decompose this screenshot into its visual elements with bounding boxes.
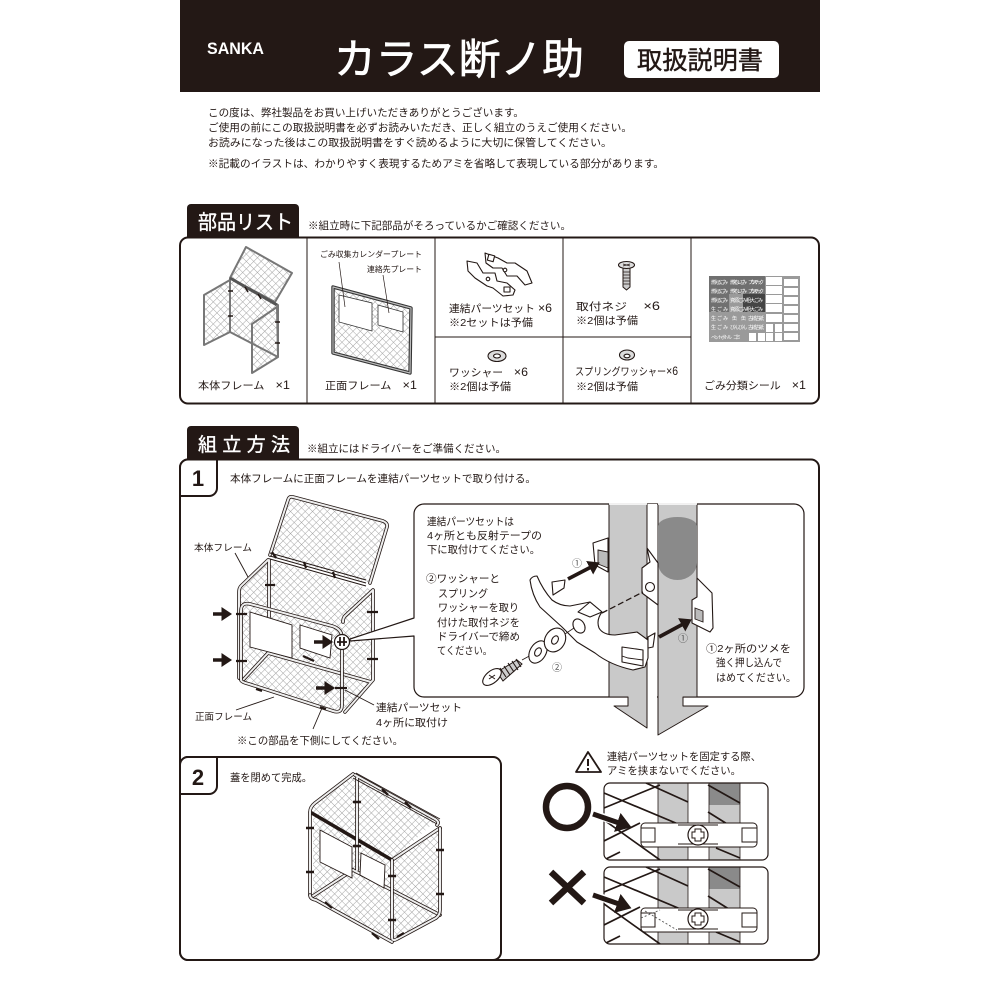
part: garbage sticker: プラスチック (748, 280, 764, 286)
heading tab: assembly (187, 426, 299, 460)
part: garbage sticker: 古紙 古紙 (748, 324, 764, 331)
frame labels (194, 542, 462, 747)
circled numbers (552, 558, 688, 674)
step 1 text: 本体フレームに正面フレームを連結パーツセットで取り付ける。 (230, 472, 536, 485)
clamp front half (530, 576, 655, 670)
part: garbage sticker: ごみ分類シール ×1 (704, 378, 806, 392)
part: garbage sticker: 粗大ごみ (746, 297, 763, 304)
warning note: アミを挟まないでください。 (607, 764, 741, 777)
part: garbage sticker: 燃えないごみ (730, 288, 747, 295)
part: garbage sticker: 資源ごみ (730, 306, 747, 313)
callout text: step 1: 強く押し込んで (716, 656, 782, 669)
part: garbage sticker: ゴミ (733, 334, 741, 341)
part: front frame: 連絡先プレート (367, 264, 422, 274)
callout: connector detail (350, 504, 804, 735)
part: garbage sticker: 生ごみ (711, 306, 728, 313)
part: main frame: 本体フレーム ×1 (198, 378, 290, 392)
dashed guide line (602, 592, 643, 613)
correct example panel (593, 783, 768, 860)
callout text: tape position: 4ヶ所とも反射テープの (427, 529, 542, 542)
part: connector set (449, 253, 552, 329)
intro text: この度は、弊社製品をお買い上げいただきありがとうございます。 (208, 106, 524, 119)
part: connector set: ※2セットは予備 (449, 317, 534, 329)
frame labels: 4ヶ所に取付け (376, 716, 448, 729)
intro text: ご使用の前にこの取扱説明書を必ずお読みいただき、正しく組立のうえご使用ください。 (208, 121, 632, 134)
circled numbers: ① (572, 558, 582, 570)
heading tab: parts list: 部品リスト (198, 211, 293, 234)
callout text: tape position: 連結パーツセットは (427, 515, 514, 528)
manual badge (624, 41, 779, 78)
callout text: step 1 (706, 642, 796, 684)
part: connector set: 連結パーツセット ×6 (449, 301, 552, 315)
connector plate with trapped mesh (641, 908, 757, 932)
step 2 number (180, 757, 217, 794)
part: spring washer (575, 350, 678, 393)
part: garbage sticker: 古紙 古紙 (748, 315, 764, 322)
arrows on frame (213, 614, 328, 688)
connector plate (641, 823, 757, 847)
step 2 number: 2 (192, 765, 204, 790)
callout text: step 2: ②ワッシャーと (426, 573, 500, 585)
warning note: 連結パーツセットを固定する際、 (607, 750, 761, 763)
correct mark (546, 786, 588, 828)
part: mounting screw (576, 262, 660, 327)
part: garbage sticker: 缶 缶 (732, 315, 746, 322)
step 2 panel (180, 757, 501, 960)
arrows into clamp (568, 566, 685, 637)
part: spring washer: ※2個は予備 (576, 380, 639, 393)
incorrect example panel (593, 867, 768, 944)
intro text (208, 106, 664, 170)
part: garbage sticker: 生ごみ (711, 324, 728, 331)
frame labels: ※この部品を下側にしてください。 (237, 734, 403, 747)
parts list note: ※組立時に下記部品がそろっているかご確認ください。 (308, 219, 571, 232)
callout text: step 2: 付けた取付ネジを (437, 616, 520, 629)
callout text: step 2: てください。 (437, 645, 492, 657)
part: garbage sticker: 燃えないごみ (730, 279, 747, 286)
part: garbage sticker: 資源ごみ (730, 297, 747, 304)
part: spring washer: スプリングワッシャー×6 (575, 364, 678, 378)
circled numbers: ② (552, 662, 562, 674)
callout text: tape position (427, 515, 542, 556)
callout text: step 2 (426, 573, 520, 657)
part: garbage sticker: 燃えるごみ (711, 279, 728, 286)
warning note (576, 750, 761, 777)
part: garbage sticker: 燃えるごみ (711, 297, 728, 304)
callout text: step 1: はめてください。 (716, 672, 796, 684)
assembly note: ※組立にはドライバーをご準備ください。 (307, 442, 506, 455)
intro text: お読みになった後はこの取扱説明書をすぐ読めるように大切に保管してください。 (208, 136, 612, 149)
part: washer: ワッシャー ×6 (449, 365, 528, 379)
panel: assembly steps (180, 460, 819, 960)
heading tab: parts list (187, 204, 299, 238)
arrow (593, 895, 622, 905)
circled numbers: ① (678, 633, 688, 645)
part: mounting screw: 取付ネジ ×6 (576, 299, 660, 313)
part: washer: ※2個は予備 (449, 380, 512, 393)
part: mounting screw: ※2個は予備 (576, 314, 639, 327)
part: main frame (198, 247, 292, 392)
callout text: step 2: ワッシャーを取り (438, 602, 519, 614)
part: garbage sticker: 生ごみ (711, 315, 728, 322)
part: garbage sticker: びん びん (730, 324, 747, 331)
callout text: step 2: スプリング (438, 587, 488, 600)
step 2 text: 蓋を閉めて完成。 (230, 772, 312, 784)
callout text: tape position: 下に取付けてください。 (427, 543, 540, 556)
part: garbage sticker: プラスチック (748, 289, 764, 295)
brand logo: SANKA (207, 39, 264, 58)
panel: parts list (180, 238, 819, 404)
illustration: closed frame (306, 773, 444, 942)
title: カラス断ノ助 (334, 36, 584, 83)
screw and washers (480, 624, 574, 689)
frame labels: 本体フレーム (194, 542, 252, 554)
step 1 number (180, 460, 217, 496)
part: front frame (320, 249, 422, 392)
header band (180, 0, 820, 92)
manual badge: 取扱説明書 (637, 47, 763, 75)
callout text: step 2: ドライバーで締め (437, 630, 520, 643)
part: garbage sticker (704, 276, 806, 392)
intro text: ※記載のイラストは、わかりやすく表現するためアミを省略して表現している部分があります。 (208, 157, 664, 170)
heading tab: assembly: 組立方法 (198, 434, 290, 456)
clamp back half (642, 548, 713, 632)
arrow (593, 814, 622, 824)
poles and downward arrow (609, 504, 708, 735)
part: front frame: ごみ収集カレンダープレート (320, 249, 422, 259)
incorrect mark (551, 872, 584, 903)
step 1 number: 1 (192, 466, 204, 491)
part: garbage sticker: 粗大ごみ (746, 306, 763, 313)
illustration: frame with lid open (236, 497, 387, 712)
part: garbage sticker: ペットボトル (711, 334, 732, 341)
clamp back box behind left pole (593, 538, 608, 572)
part: garbage sticker: 燃えるごみ (711, 288, 728, 295)
frame labels: 連結パーツセット (376, 701, 462, 714)
frame labels: 正面フレーム (195, 712, 252, 723)
callout text: step 1: ①2ヶ所のツメを (706, 642, 791, 655)
part: front frame: 正面フレーム ×1 (325, 378, 417, 392)
part: washer (449, 350, 528, 393)
